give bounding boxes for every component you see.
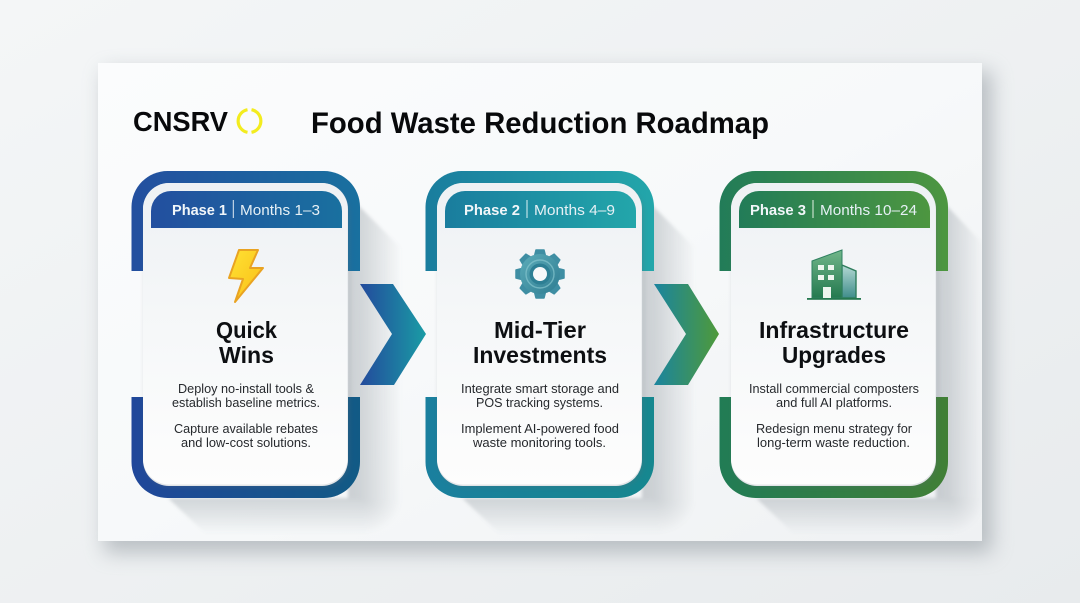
long shadows	[168, 195, 984, 534]
body text: Implement AI-powered food	[461, 421, 619, 436]
heading	[216, 317, 277, 368]
header: Months 4–9	[534, 202, 615, 219]
panel: phase 3	[720, 171, 948, 498]
body text: Capture available rebates	[174, 421, 318, 436]
body text: waste monitoring tools.	[472, 435, 606, 450]
card	[143, 183, 348, 486]
icon: lightning bolt	[229, 250, 263, 302]
arrow: phase 2 to 3	[654, 284, 719, 385]
frame	[426, 171, 654, 498]
arrow: phase 1 to 2	[360, 284, 426, 385]
heading: Infrastructure	[759, 317, 909, 343]
heading: Mid-Tier	[494, 317, 586, 343]
header: Phase 1	[172, 202, 227, 219]
body text: and low-cost solutions.	[181, 435, 311, 450]
heading: Upgrades	[782, 342, 886, 368]
body text: Redesign menu strategy for	[756, 421, 913, 436]
icon: building	[807, 250, 861, 300]
card	[731, 183, 936, 486]
body text	[172, 381, 320, 450]
body text: and full AI platforms.	[776, 395, 892, 410]
card	[437, 183, 642, 486]
panel: phase 2	[426, 171, 654, 498]
heading: Quick	[216, 317, 277, 343]
header: Months 1–3	[240, 202, 320, 219]
body text: establish baseline metrics.	[172, 395, 320, 410]
heading	[473, 317, 607, 368]
heading: Wins	[219, 342, 274, 368]
header: Phase 2	[464, 202, 520, 219]
header	[151, 191, 342, 228]
body text: long-term waste reduction.	[757, 435, 910, 450]
body text: POS tracking systems.	[476, 395, 603, 410]
body text	[461, 381, 619, 450]
frame	[132, 171, 360, 498]
body text: Integrate smart storage and	[461, 381, 619, 396]
body text	[749, 381, 919, 450]
icon: logo ring	[238, 110, 261, 132]
body text: Deploy no-install tools &	[178, 381, 314, 396]
header: Phase 3	[750, 202, 806, 219]
header	[445, 191, 636, 228]
body text: Install commercial composters	[749, 381, 919, 396]
logo: CNSRV: CNSRV	[133, 106, 228, 137]
header	[739, 191, 930, 228]
title: Food Waste Reduction Roadmap	[311, 107, 769, 140]
frame	[720, 171, 948, 498]
slide panel	[98, 63, 992, 553]
header: Months 10–24	[820, 202, 917, 219]
panel: phase 1	[132, 171, 360, 498]
icon: gear	[516, 250, 564, 298]
heading: Investments	[473, 342, 607, 368]
heading	[759, 317, 909, 368]
